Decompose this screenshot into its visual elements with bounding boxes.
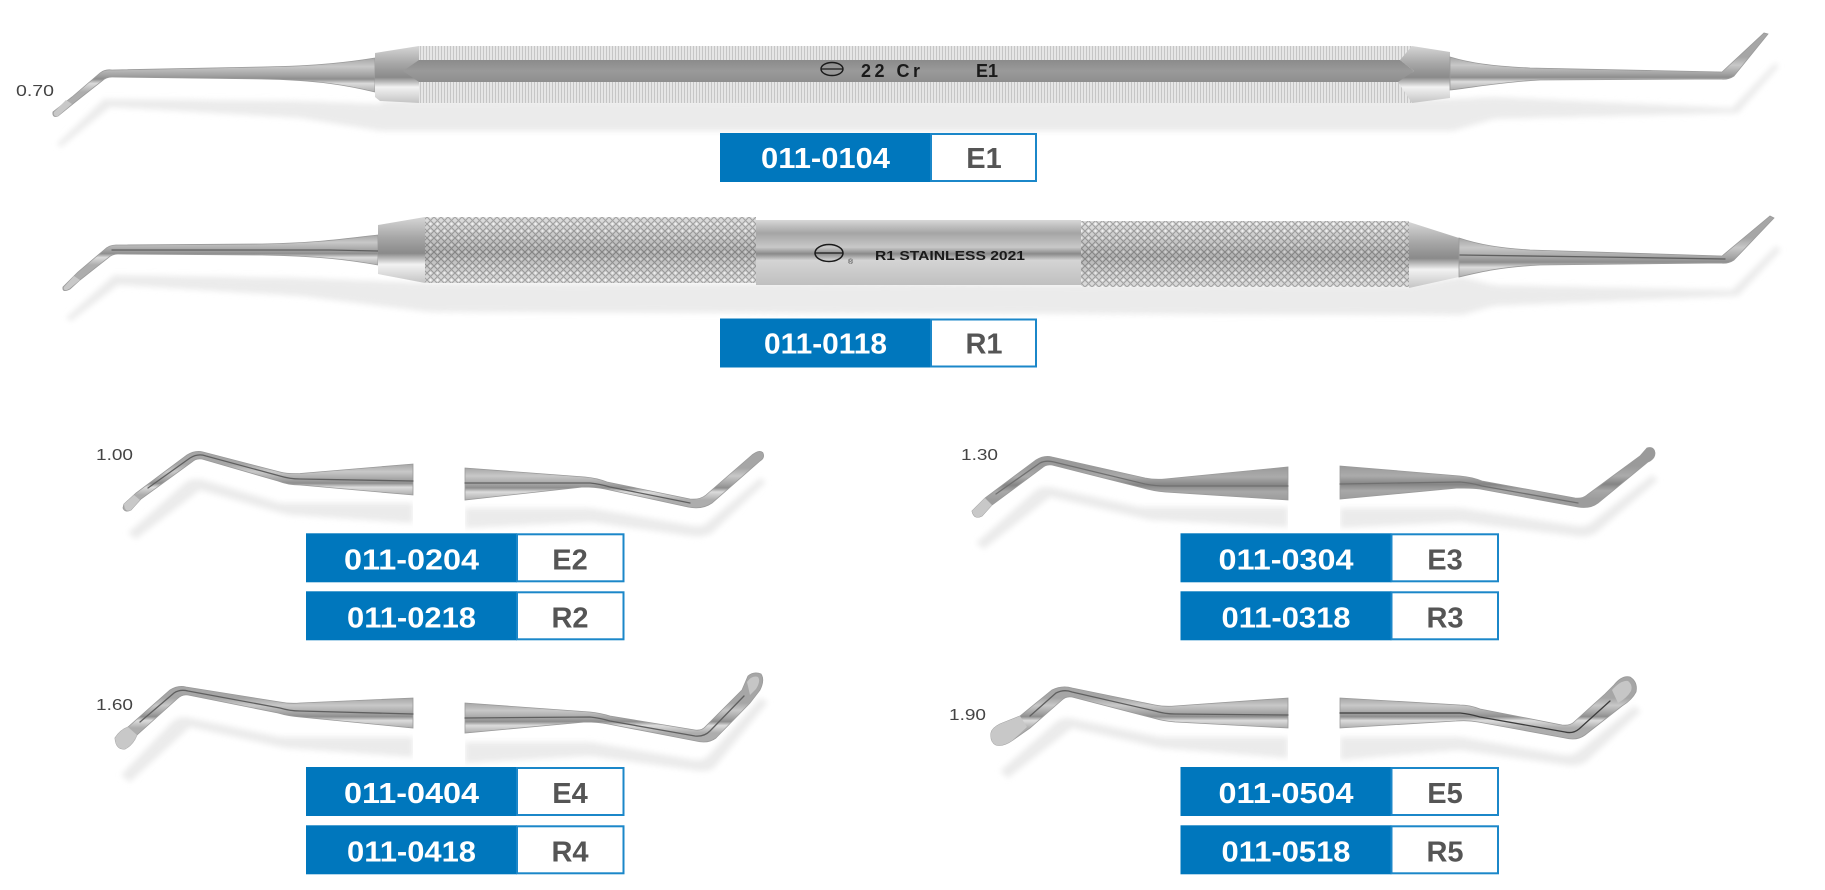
size 1.60: 1.60 bbox=[96, 697, 133, 714]
R1 handle engraving bbox=[815, 244, 1025, 266]
E5 left half bbox=[991, 687, 1288, 745]
E4 left half bbox=[115, 686, 413, 749]
code label 011-0418 R4 bbox=[306, 825, 624, 874]
E1 handle engraving bbox=[821, 61, 998, 81]
instrument E1 bbox=[53, 33, 1768, 116]
code labels E2 R2 bbox=[306, 533, 624, 640]
code label 011-0218 R2 bbox=[306, 591, 624, 640]
code label 011-0104 E1 bbox=[720, 133, 1036, 182]
code label 011-0304 E3: E3 bbox=[1427, 544, 1463, 576]
E1 left working end bbox=[53, 58, 375, 116]
instrument E4 bbox=[115, 673, 763, 749]
E1 hexagonal handle bbox=[375, 46, 1450, 103]
code label 011-0418 R4: R4 bbox=[551, 836, 589, 868]
size 1.00: 1.00 bbox=[96, 447, 133, 464]
code label 011-0304 E3 bbox=[1180, 533, 1498, 582]
code label 011-0518 R5: R5 bbox=[1426, 836, 1464, 868]
instrument shadows bbox=[57, 63, 1781, 782]
code labels E4 R4 bbox=[306, 767, 624, 874]
E4 right half bbox=[465, 673, 763, 742]
code label 011-0504 E5: 011-0504 bbox=[1218, 778, 1354, 810]
instrument R1 bbox=[63, 216, 1774, 291]
code label 011-0404 E4 bbox=[306, 767, 624, 816]
E2 left half bbox=[123, 451, 413, 511]
code label 011-0304 E3: 011-0304 bbox=[1218, 544, 1354, 576]
R1 left working end bbox=[63, 235, 378, 291]
R1 right working end bbox=[1459, 216, 1774, 277]
code labels E5 R5 bbox=[1180, 767, 1498, 874]
code label 011-0404 E4: E4 bbox=[552, 778, 588, 810]
code label 011-0318 R3: R3 bbox=[1426, 602, 1464, 634]
code label 011-0318 R3: 011-0318 bbox=[1222, 602, 1350, 634]
E1 handle engraving: E1 bbox=[976, 61, 998, 81]
code labels E3 R3 bbox=[1180, 533, 1498, 640]
code label 011-0504 E5: E5 bbox=[1427, 778, 1463, 810]
size 1.30: 1.30 bbox=[961, 447, 998, 464]
E3 left half bbox=[972, 456, 1288, 517]
code label 011-0218 R2: R2 bbox=[551, 602, 589, 634]
code label 011-0504 E5 bbox=[1180, 767, 1498, 816]
R1 handle engraving: R1 STAINLESS 2021 bbox=[875, 248, 1025, 263]
instrument E2 bbox=[123, 451, 764, 511]
code label 011-0104 E1: 011-0104 bbox=[761, 143, 890, 175]
code label 011-0204 E2 bbox=[306, 533, 624, 582]
instrument E5 bbox=[991, 677, 1636, 745]
code label 011-0404 E4: 011-0404 bbox=[344, 778, 479, 810]
R1 knurled handle bbox=[378, 217, 1459, 288]
code label 011-0118 R1: 011-0118 bbox=[764, 328, 887, 360]
code label 011-0204 E2: 011-0204 bbox=[344, 544, 479, 576]
code label 011-0104 E1: E1 bbox=[966, 143, 1002, 175]
E1 right working end bbox=[1450, 33, 1768, 90]
E2 right half bbox=[465, 451, 764, 508]
size 1.90: 1.90 bbox=[949, 707, 986, 724]
instrument E3 bbox=[972, 448, 1655, 517]
E3 right half bbox=[1340, 448, 1655, 508]
size 0.70: 0.70 bbox=[16, 83, 54, 100]
code label 011-0518 R5 bbox=[1180, 825, 1498, 874]
E5 right half bbox=[1340, 677, 1636, 739]
E1 handle engraving: 22 Cr bbox=[861, 61, 920, 81]
code label 011-0204 E2: E2 bbox=[552, 544, 588, 576]
code label 011-0218 R2: 011-0218 bbox=[347, 602, 476, 634]
code label 011-0318 R3 bbox=[1180, 591, 1498, 640]
code label 011-0118 R1 bbox=[720, 318, 1036, 368]
code label 011-0118 R1: R1 bbox=[965, 328, 1003, 360]
code label 011-0518 R5: 011-0518 bbox=[1222, 836, 1350, 868]
code label 011-0418 R4: 011-0418 bbox=[347, 836, 476, 868]
R1 handle engraving: ® bbox=[848, 258, 854, 266]
